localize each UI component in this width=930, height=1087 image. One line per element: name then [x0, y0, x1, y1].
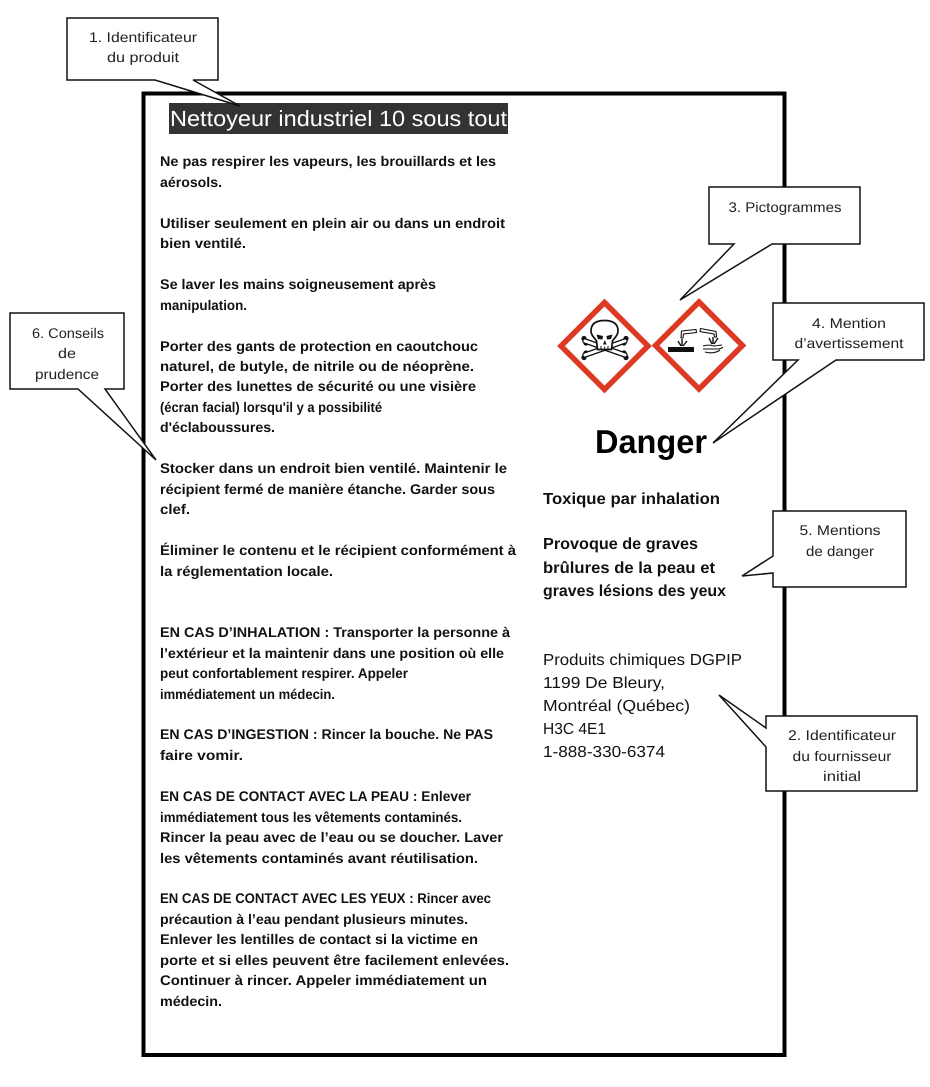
skull head — [591, 320, 618, 350]
supplier identifier: Produits chimiques DGPIP — [543, 652, 742, 669]
supplier identifier: H3C 4E1 — [543, 721, 606, 738]
precautionary statements text: bien ventilé. — [160, 235, 246, 251]
supplier identifier — [543, 652, 742, 761]
precautionary statements text: précaution à l’eau pendant plusieurs minutes. — [160, 911, 468, 927]
precautionary statements text: immédiatement un médecin. — [160, 686, 335, 702]
callout 2: supplier identifier: 2. Identificateur — [788, 727, 896, 743]
precautionary statements text: la réglementation locale. — [160, 563, 333, 579]
callout 5: hazard statements: de danger — [806, 543, 874, 559]
precautionary statements text: porte et si elles peuvent être facilement enlevées. — [160, 952, 509, 968]
precautionary statements text: (écran facial) lorsqu'il y a possibilité — [160, 399, 382, 415]
precautionary statements text: médecin. — [160, 993, 222, 1009]
icon: skull and crossbones pictogram — [561, 302, 648, 390]
precautionary statements text: les vêtements contaminés avant réutilisation. — [160, 850, 478, 866]
precautionary statements text: Porter des gants de protection en caoutchouc — [160, 338, 478, 354]
callout 3: pictograms — [680, 187, 860, 300]
precautionary statements text: EN CAS D’INGESTION : Rincer la bouche. Ne PAS — [160, 726, 493, 742]
precautionary statements text: clef. — [160, 501, 190, 517]
hazard statements: graves lésions des yeux — [543, 583, 726, 600]
icon: corrosion pictogram — [656, 302, 742, 389]
precautionary statements text: naturel, de butyle, de nitrile ou de néoprène. — [160, 358, 474, 374]
skull eyes and nose — [596, 334, 612, 344]
callout 5: hazard statements — [742, 511, 906, 587]
callout 4: signal word — [713, 303, 924, 443]
signal word: Danger — [595, 423, 707, 460]
callout 2: supplier identifier — [719, 695, 917, 791]
precautionary statements text: Enlever les lentilles de contact si la victime en — [160, 931, 478, 947]
callout 1: product identifier — [67, 18, 240, 106]
callout 3: pictograms: 3. Pictogrammes — [728, 199, 842, 215]
hazard statements — [543, 491, 726, 600]
precautionary statements text: Porter des lunettes de sécurité ou une visière — [160, 378, 476, 394]
callout 1: product identifier: du produit — [107, 49, 179, 65]
precautionary statements text: Stocker dans un endroit bien ventilé. Maintenir le — [160, 460, 507, 476]
callout 5: hazard statements: 5. Mentions — [800, 522, 880, 538]
product name banner: Nettoyeur industriel 10 sous tout — [170, 106, 507, 131]
precautionary statements text: Ne pas respirer les vapeurs, les brouillards et les — [160, 153, 496, 169]
precautionary statements text: Continuer à rincer. Appeler immédiatement un — [160, 972, 487, 988]
callout 6: precautionary statements: 6. Conseils — [32, 325, 104, 341]
callout 2: supplier identifier: du fournisseur — [792, 748, 892, 764]
precautionary statements text: faire vomir. — [160, 747, 243, 763]
precautionary statements text: manipulation. — [160, 297, 247, 313]
precautionary statements text: aérosols. — [160, 174, 222, 190]
precautionary statements text: l’extérieur et la maintenir dans une position où elle — [160, 645, 504, 661]
supplier identifier: Montréal (Québec) — [543, 698, 690, 715]
precautionary statements text: EN CAS D’INHALATION : Transporter la personne à — [160, 624, 510, 640]
label frame — [144, 94, 784, 1055]
precautionary statements text: peut confortablement respirer. Appeler — [160, 665, 409, 681]
hazard statements: brûlures de la peau et — [543, 560, 716, 577]
precautionary statements text: Éliminer le contenu et le récipient conformément à — [160, 542, 516, 558]
hazard statements: Provoque de graves — [543, 536, 698, 553]
precautionary statements text: Utiliser seulement en plein air ou dans un endroit — [160, 215, 505, 231]
callout 6: precautionary statements: prudence — [35, 366, 99, 382]
supplier identifier: 1199 De Bleury, — [543, 675, 665, 692]
precautionary statements text: Rincer la peau avec de l’eau ou se doucher. Laver — [160, 829, 504, 845]
precautionary statements text: Se laver les mains soigneusement après — [160, 276, 436, 292]
precautionary statements text: d'éclaboussures. — [160, 419, 275, 435]
callout 2: supplier identifier: initial — [823, 768, 861, 784]
precautionary statements text: immédiatement tous les vêtements contaminés. — [160, 809, 462, 825]
callout 6: precautionary statements: de — [58, 345, 76, 361]
hazard statements: Toxique par inhalation — [543, 491, 720, 508]
supplier identifier: 1-888-330-6374 — [543, 744, 665, 761]
callout 4: signal word: 4. Mention — [812, 315, 886, 331]
bones black outline — [582, 337, 628, 359]
precautionary statements text: récipient fermé de manière étanche. Garder sous — [160, 481, 495, 497]
callout 6: precautionary statements — [10, 313, 156, 460]
precautionary statements text: EN CAS DE CONTACT AVEC LES YEUX : Rincer avec — [160, 890, 491, 906]
precautionary statements text — [160, 153, 516, 1009]
callout 4: signal word: d’avertissement — [794, 335, 904, 351]
callout 1: product identifier: 1. Identificateur — [89, 29, 197, 45]
precautionary statements text: EN CAS DE CONTACT AVEC LA PEAU : Enlever — [160, 788, 472, 804]
